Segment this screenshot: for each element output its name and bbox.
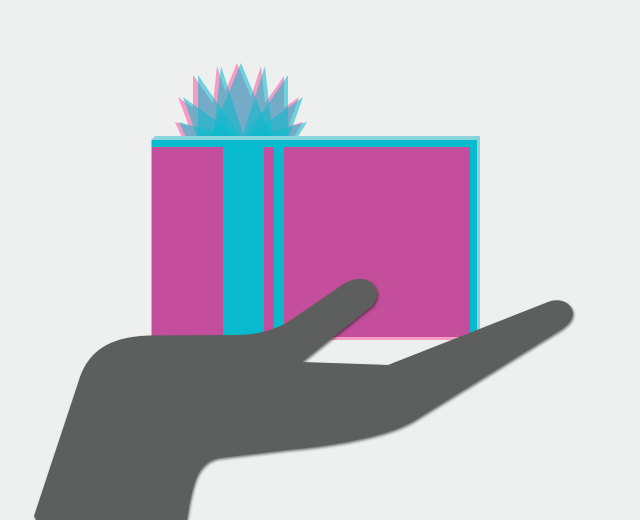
ribbon: narrow vertical band — [274, 147, 284, 337]
bow: cyan petals — [179, 63, 307, 140]
gift box: magenta body — [152, 147, 470, 337]
gift box: pink base edge — [152, 147, 473, 340]
bow: pink offset layer — [175, 63, 303, 140]
gift box: cyan layer — [152, 140, 477, 337]
hand — [34, 279, 573, 520]
gift box: light cyan back layer — [151, 136, 480, 330]
ribbon: wide vertical band — [223, 147, 264, 342]
